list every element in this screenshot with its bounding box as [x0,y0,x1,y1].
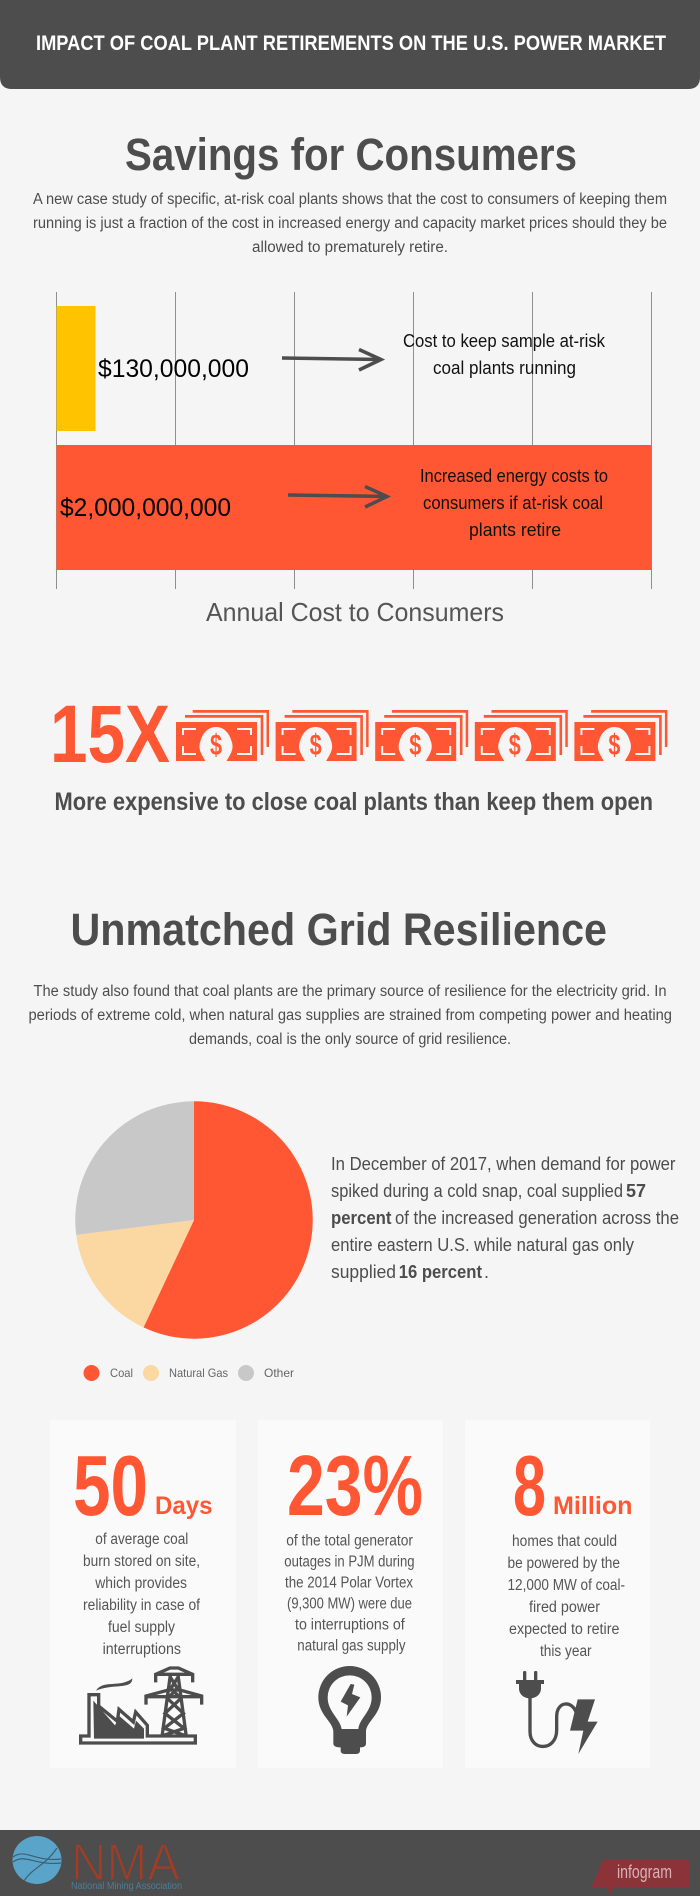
icon: light bulb [318,1666,381,1754]
label: increased energy costs: plants retire [469,520,561,540]
icon: money 5 [574,710,667,762]
card text: to interruptions of [295,1616,405,1633]
icon: money bills row [176,710,667,762]
icon: money 1: $ [210,729,222,762]
icon: money 1 [176,710,269,762]
badge: infogram: infogram [617,1862,672,1882]
text block: December 2017: percent [331,1208,392,1228]
pie chart: generation share [75,1101,313,1339]
card text: this year [540,1643,592,1660]
heading: Unmatched Grid Resilience: Unmatched Grid Resilience [70,904,607,955]
card text: interruptions [103,1641,181,1658]
label: increased energy costs [420,466,608,540]
big number: 15X: 15X [50,689,170,780]
arrow: top [282,350,381,370]
text block: December 2017: spiked during a cold snap, coal supplied [331,1181,623,1201]
logo: NMA letters: NMA [71,1834,180,1892]
card text: of the total generator [286,1532,413,1549]
header banner [0,0,700,89]
text block: December 2017: 57 [626,1181,646,1201]
slice: natural gas 16 percent [76,1220,194,1327]
footer bar [0,1830,700,1896]
chart legend [84,1365,294,1381]
intro paragraph: savings [33,191,667,256]
stat: 50: 50 [73,1439,148,1534]
text block: December 2017: entire eastern U.S. while natural gas only [331,1235,634,1255]
text block: December 2017: supplied [331,1262,396,1282]
label: increased energy costs: Increased energy costs to [420,466,608,486]
icon: money 4: $ [509,729,521,762]
card text: (9,300 MW) were due [287,1595,412,1612]
icon: money 2: $ [310,729,322,762]
bar chart: annual cost to consumers [56,292,652,627]
label: cost to keep running: coal plants running [433,358,576,378]
intro paragraph: resilience: periods of extreme cold, when natural gas supplies are strained from competing power and heating [28,1007,672,1024]
slice: other 27 percent [75,1101,194,1235]
card text: burn stored on site, [83,1553,200,1570]
icon: money 3 [375,710,468,762]
card text: natural gas supply [297,1637,406,1654]
stat: 8: 8 [513,1439,546,1534]
heading: Savings for Consumers: Savings for Consumers [125,129,577,180]
card text [284,1532,414,1654]
stat: 23%: 23% [287,1439,423,1534]
card text: expected to retire [509,1621,619,1638]
value: 2 billion: $2,000,000,000 [60,494,231,522]
intro paragraph: resilience: demands, coal is the only source of grid resilience. [189,1031,511,1048]
label: cost to keep running: Cost to keep sample at-risk [403,331,606,351]
text block: December 2017: of the increased generation across the [395,1208,679,1228]
icon: money 2 [276,710,369,762]
intro paragraph: savings: running is just a fraction of the cost in increased energy and capacity market prices should they be [33,215,667,232]
text block: December 2017: . [484,1262,489,1282]
bar: increased energy costs [56,445,652,570]
bar: cost to keep running [56,306,96,431]
slice: coal 57 percent [144,1101,313,1339]
card text: which provides [94,1575,187,1592]
intro paragraph: resilience [28,983,672,1048]
label: increased energy costs: consumers if at-risk coal [423,493,603,513]
card text: fuel supply [108,1619,175,1636]
logo: NMA globe [12,1836,62,1884]
chart legend: Coal [110,1366,133,1380]
icon: money 3: $ [409,729,421,762]
intro paragraph: resilience: The study also found that coal plants are the primary source of resilience for the electricity grid. In [34,983,666,1000]
card text [83,1531,201,1658]
panel: 8 million [465,1420,650,1768]
stat unit: Days: Days [155,1492,212,1520]
icon: plug with lightning [516,1671,598,1754]
badge: infogram [592,1860,690,1895]
panel: 23 percent [258,1420,443,1768]
icon: money 5: $ [608,729,621,762]
value: 130 million: $130,000,000 [98,355,249,383]
chart axis title: Annual Cost to Consumers [206,597,504,627]
card text: homes that could [512,1533,617,1550]
card text: fired power [529,1599,600,1616]
logo: association name: National Mining Association [71,1881,182,1892]
card text: the 2014 Polar Vortex [285,1574,413,1591]
text block: December 2017: In December of 2017, when demand for power [331,1154,676,1174]
intro paragraph: savings: A new case study of specific, at-risk coal plants shows that the cost to consumers of keeping them [33,191,667,208]
card text: be powered by the [508,1555,620,1572]
stat unit: Million: Million [553,1492,632,1520]
panel: 50 days [50,1420,236,1768]
card text: 12,000 MW of coal- [508,1577,625,1594]
chart legend: Natural Gas [169,1366,228,1380]
card text: of average coal [95,1531,188,1548]
text block: December 2017: 16 percent [399,1262,482,1282]
card text: outages in PJM during [284,1553,414,1570]
text block: December 2017 [331,1154,679,1282]
label: cost to keep running [403,331,606,378]
icon: factory and pylon [81,1668,202,1743]
intro paragraph: savings: allowed to prematurely retire. [252,239,448,256]
arrow: bottom [288,486,387,507]
card text [508,1533,625,1660]
chart legend: Other [264,1366,294,1380]
card text: reliability in case of [83,1597,201,1614]
icon: money 4 [475,710,568,762]
